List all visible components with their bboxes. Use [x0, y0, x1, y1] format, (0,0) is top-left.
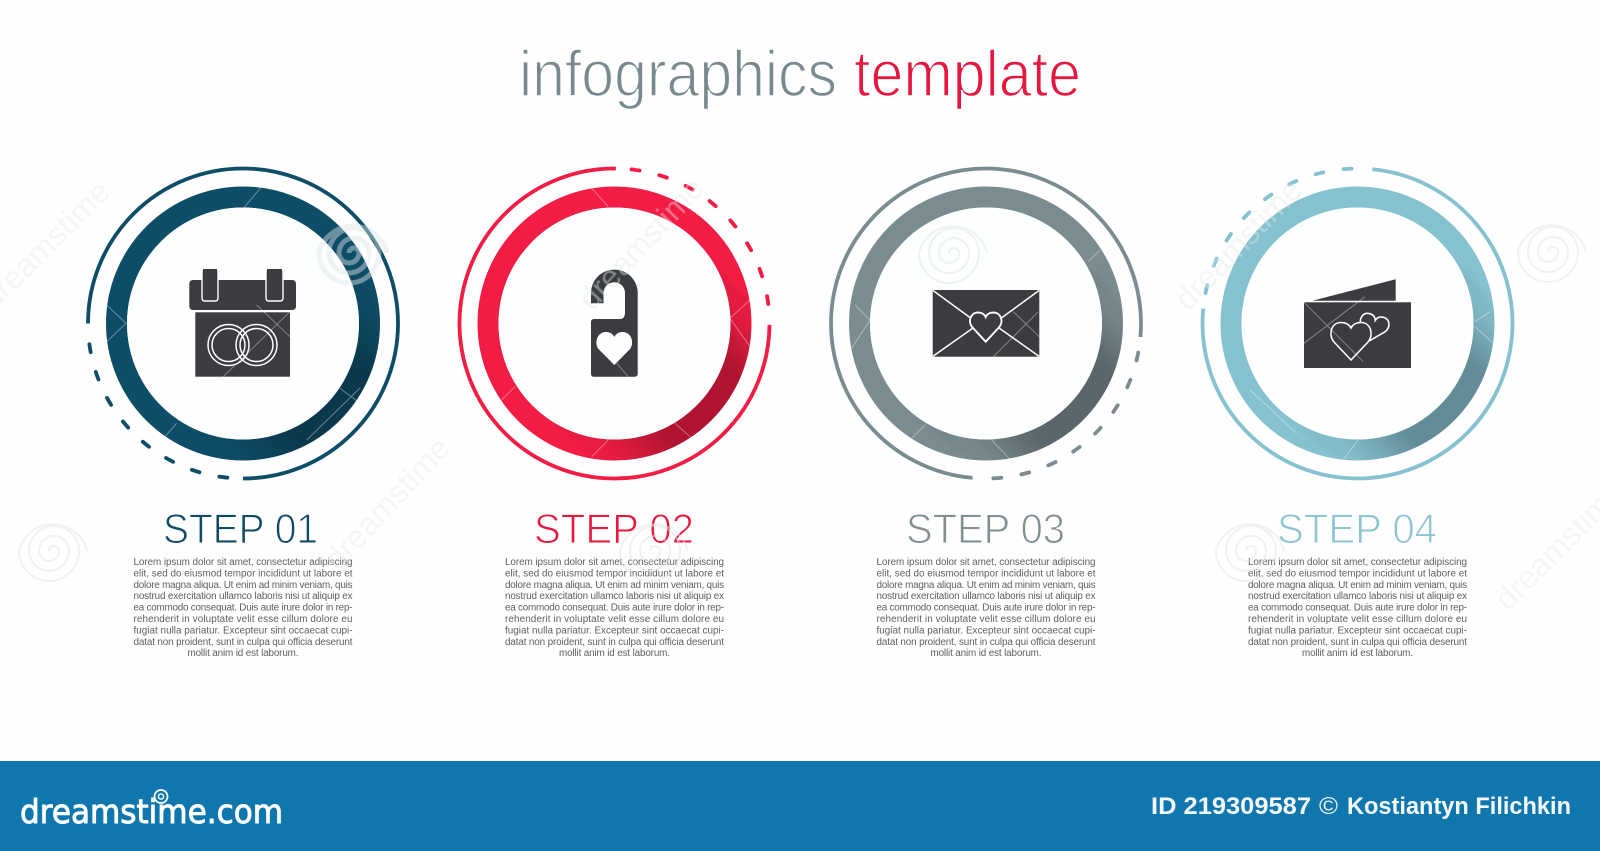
step 2 text block: elit, sed do eiusmod tempor incididunt ut labore et [505, 568, 724, 579]
step 3 text block: rehenderit in voluptate velit esse cillum dolore eu [876, 614, 1096, 625]
step 4 circle [1200, 166, 1514, 480]
step 4 text block: rehenderit in voluptate velit esse cillum dolore eu [1248, 614, 1467, 625]
step 1 text block: elit, sed do eiusmod tempor incididunt ut labore et [134, 568, 353, 579]
step 4 text block: nostrud exercitation ullamco laboris nisi ut aliquip ex [1248, 591, 1467, 602]
step 1 text block: nostrud exercitation ullamco laboris nisi ut aliquip ex [134, 591, 353, 602]
step 4 text block: fugiat nulla pariatur. Excepteur sint occaecat cupi- [1248, 625, 1467, 636]
step 4 text block: ea commodo consequat. Duis aute irure dolor in rep- [1248, 603, 1467, 614]
watermark: spirals, diagonal marks and thin crossing lines: dreamstime [1167, 172, 1309, 317]
step 3 text block: Lorem ipsum dolor sit amet, consectetur adipiscing [876, 557, 1096, 568]
step 1 text block: rehenderit in voluptate velit esse cillum dolore eu [134, 614, 352, 625]
step 2 text block: fugiat nulla pariatur. Excepteur sint occaecat cupi- [505, 625, 724, 636]
step 4 text block: elit, sed do eiusmod tempor incididunt ut labore et [1248, 568, 1467, 579]
icon: door hanger with heart [591, 270, 638, 377]
step 2 text block: mollit anim id est laborum. [559, 648, 670, 659]
footer credit: ID 219309587 [1151, 793, 1311, 820]
step 4 text block: datat non proident, sunt in culpa qui officia deserunt [1248, 637, 1467, 648]
step 2 text block: ea commodo consequat. Duis aute irure dolor in rep- [505, 603, 724, 614]
step 4 text block: dolore magna aliqua. Ut enim ad minim veniam, quis [1248, 580, 1467, 591]
watermark: spirals, diagonal marks and thin crossing lines [0, 170, 1600, 617]
footer credit: Kostiantyn Filichkin [1347, 793, 1571, 820]
step 3 text block: dolore magna aliqua. Ut enim ad minim veniam, quis [876, 580, 1096, 591]
step 3 text block: nostrud exercitation ullamco laboris nisi ut aliquip ex [876, 591, 1096, 602]
footer credit [1151, 793, 1571, 820]
step 2 text block: nostrud exercitation ullamco laboris nisi ut aliquip ex [505, 591, 724, 602]
step 1 text block: dolore magna aliqua. Ut enim ad minim veniam, quis [134, 580, 353, 591]
footer logo: dreamstime.com [20, 792, 283, 831]
icon: calendar with wedding rings [189, 269, 296, 377]
step 2 text block: Lorem ipsum dolor sit amet, consectetur adipiscing [505, 557, 724, 568]
step 1 text block: mollit anim id est laborum. [188, 648, 298, 659]
step 2 text block: dolore magna aliqua. Ut enim ad minim veniam, quis [505, 580, 724, 591]
step 1 text block: fugiat nulla pariatur. Excepteur sint occaecat cupi- [134, 625, 352, 636]
step 2 circle [458, 167, 771, 480]
footer bar [0, 761, 1600, 851]
step 1 heading: STEP 01 [163, 505, 318, 552]
step 3 text block [876, 557, 1096, 659]
step 1 text block: datat non proident, sunt in culpa qui officia deserunt [134, 637, 353, 648]
step 2 text block: rehenderit in voluptate velit esse cillum dolore eu [505, 614, 724, 625]
title: template [854, 37, 1081, 110]
step 2 text block: datat non proident, sunt in culpa qui officia deserunt [505, 637, 724, 648]
title [519, 37, 1081, 110]
step 2 text block [505, 557, 724, 659]
step 3 text block: mollit anim id est laborum. [930, 648, 1042, 659]
watermark: spirals, diagonal marks and thin crossing lines: dreamstime [317, 430, 457, 577]
icon: envelope with heart [933, 290, 1039, 357]
title: infographics [519, 37, 837, 110]
step 4 text block: Lorem ipsum dolor sit amet, consectetur adipiscing [1248, 557, 1467, 568]
step 3 heading: STEP 03 [906, 505, 1065, 552]
step 3 text block: elit, sed do eiusmod tempor incididunt ut labore et [876, 568, 1096, 579]
step 3 text block: ea commodo consequat. Duis aute irure dolor in rep- [876, 603, 1096, 614]
step 1 text block: Lorem ipsum dolor sit amet, consectetur adipiscing [134, 557, 352, 568]
step 4 text block [1248, 557, 1467, 659]
step 1 text block: ea commodo consequat. Duis aute irure dolor in rep- [134, 603, 352, 614]
step 2 heading: STEP 02 [534, 505, 694, 552]
step 3 text block: fugiat nulla pariatur. Excepteur sint occaecat cupi- [876, 625, 1096, 636]
step 4 text block: mollit anim id est laborum. [1302, 648, 1413, 659]
step 1 circle [88, 168, 398, 478]
step 3 text block: datat non proident, sunt in culpa qui officia deserunt [876, 637, 1096, 648]
icon: greeting card with hearts [1304, 279, 1411, 368]
step 4 heading: STEP 04 [1277, 505, 1437, 552]
watermark: spirals, diagonal marks and thin crossing lines: dreamstime [571, 170, 711, 317]
footer credit: © [1319, 793, 1338, 820]
step 1 text block [134, 557, 353, 659]
step 3 circle [829, 166, 1143, 480]
